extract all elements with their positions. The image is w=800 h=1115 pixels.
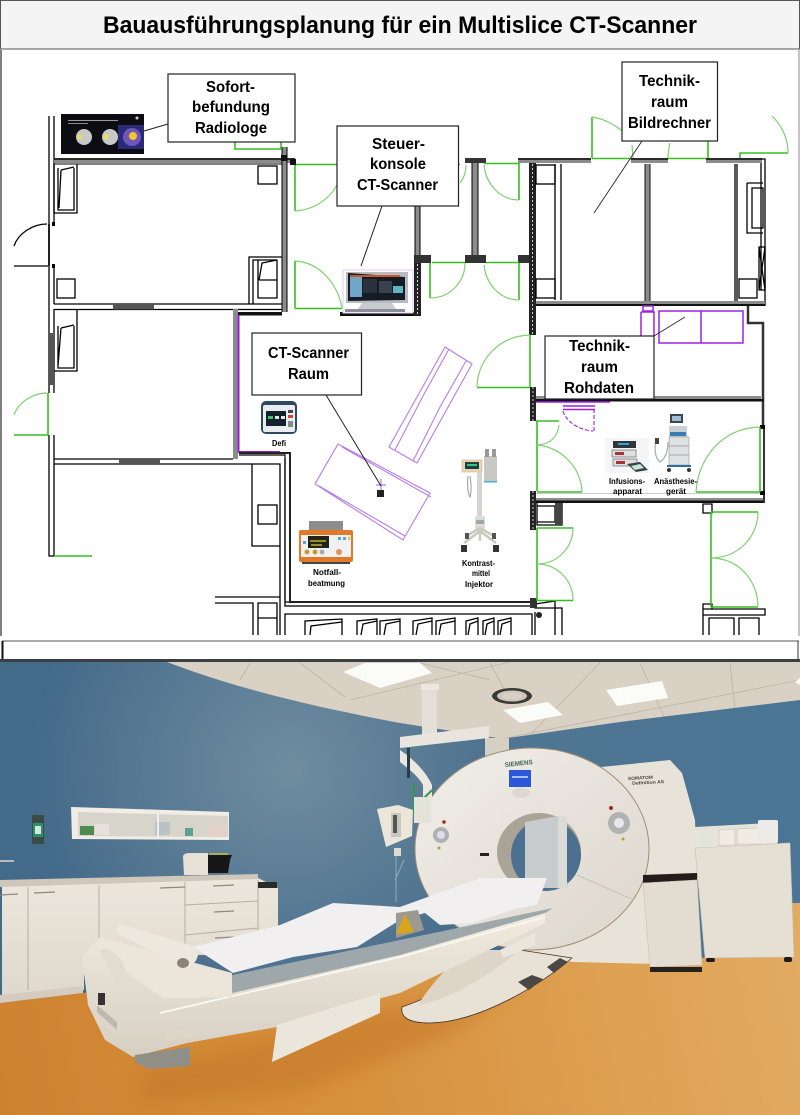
icon: emergency ventilator xyxy=(299,521,353,564)
wall right xyxy=(508,700,800,1000)
wall shelf xyxy=(71,807,229,840)
icon: contrast injector xyxy=(461,449,499,552)
callout: Technikraum Bildrechner: raum xyxy=(651,94,688,111)
label: Anästhesiegerät: Anästhesie- xyxy=(654,476,697,486)
callout: Technikraum Rohdaten xyxy=(545,317,685,399)
divider bar xyxy=(0,636,800,660)
icon: CT scan thumbnail xyxy=(61,114,144,154)
ceiling vent xyxy=(492,688,532,704)
label: Notfallbeatmung xyxy=(308,567,345,588)
callout: Technikraum Bildrechner: Bildrechner xyxy=(628,115,711,132)
floor shadow xyxy=(140,970,540,1104)
callout: Technikraum Rohdaten: raum xyxy=(581,359,618,376)
label: Defi: Defi xyxy=(272,438,286,448)
callout: Technikraum Bildrechner xyxy=(594,62,718,213)
label: Infusionsapparat: apparat xyxy=(613,486,642,496)
callout: CT-Scanner Raum: Raum xyxy=(288,366,329,383)
photo: CT scanner room xyxy=(0,659,800,1115)
floor plan xyxy=(1,50,799,636)
walls: console and corridor xyxy=(340,158,536,335)
right cabinet xyxy=(695,843,794,962)
callout: Steuerkonsole CT-Scanner: Steuer- xyxy=(372,136,425,153)
icon: infusion pumps xyxy=(605,438,649,473)
column xyxy=(485,738,509,788)
callout: Technikraum Rohdaten: Technik- xyxy=(569,338,630,355)
text: SIEMENS logo: SIEMENS xyxy=(504,759,534,769)
table base xyxy=(402,950,572,1023)
label: Kontrastmittel Injektor xyxy=(462,558,495,589)
title: Bauausführungsplanung für ein Multislice CT-Scanner xyxy=(103,12,697,39)
label: Kontrastmittel Injektor: Injektor xyxy=(465,579,494,589)
callout: Sofortbefundung Radiologe: Radiologe xyxy=(195,120,267,137)
label: Anästhesiegerät: gerät xyxy=(666,486,686,496)
table mattress xyxy=(232,908,553,993)
wall left xyxy=(0,662,510,1010)
callout: Steuerkonsole CT-Scanner xyxy=(337,126,458,266)
callout: Sofortbefundung Radiologe: befundung xyxy=(192,99,270,116)
green doors xyxy=(14,116,788,607)
label: Infusionsapparat: Infusions- xyxy=(609,476,645,486)
patient monitor on arm xyxy=(377,805,413,902)
head rest xyxy=(100,924,232,998)
text: SOMATOM model: Definition AS xyxy=(632,779,664,786)
text: SOMATOM model xyxy=(628,774,664,786)
callout: CT-Scanner Raum xyxy=(252,333,384,497)
walls: CT room xyxy=(233,309,562,635)
callout: Steuerkonsole CT-Scanner: konsole xyxy=(370,156,426,173)
gantry ring xyxy=(415,748,664,950)
icon: anesthesia machine xyxy=(655,414,691,472)
hand disinfectant dispenser xyxy=(32,815,44,844)
printer and bin xyxy=(183,853,232,875)
rear counter xyxy=(695,820,778,849)
wall cabinets xyxy=(0,861,278,1003)
patient table xyxy=(82,912,545,1069)
title xyxy=(0,0,800,49)
icon: console monitor xyxy=(343,270,413,313)
paper sheet xyxy=(193,878,547,973)
label: Notfallbeatmung: Notfall- xyxy=(313,567,341,577)
floor xyxy=(0,903,800,1115)
callout: Technikraum Bildrechner: Technik- xyxy=(639,73,700,90)
callout: Sofortbefundung Radiologe xyxy=(144,74,295,142)
gantry housing xyxy=(520,760,702,965)
patient table outline xyxy=(389,347,472,463)
front cabinet xyxy=(643,873,702,972)
label: Anästhesiegerät xyxy=(654,476,697,496)
label: Kontrastmittel Injektor: Kontrast- xyxy=(462,558,495,568)
callout: CT-Scanner Raum: CT-Scanner xyxy=(268,345,349,362)
ceiling xyxy=(0,659,800,770)
label: Infusionsapparat xyxy=(609,476,645,496)
gantry outline xyxy=(315,444,431,540)
warning sign xyxy=(396,910,424,938)
icon: defibrillator xyxy=(261,401,297,434)
walls: technical rooms xyxy=(518,158,765,635)
walls: left wing xyxy=(14,116,295,635)
callout: Steuerkonsole CT-Scanner: CT-Scanner xyxy=(357,177,438,194)
callout: Technikraum Rohdaten: Rohdaten xyxy=(564,380,634,397)
label: Kontrastmittel Injektor: mittel xyxy=(472,568,490,578)
ceiling lights xyxy=(343,663,800,723)
text: SOMATOM model: SOMATOM xyxy=(628,775,653,781)
callout: Sofortbefundung Radiologe: Sofort- xyxy=(206,79,255,96)
label: Notfallbeatmung: beatmung xyxy=(308,578,345,588)
ceiling arm xyxy=(400,684,489,823)
purple equipment outlines xyxy=(315,306,743,540)
